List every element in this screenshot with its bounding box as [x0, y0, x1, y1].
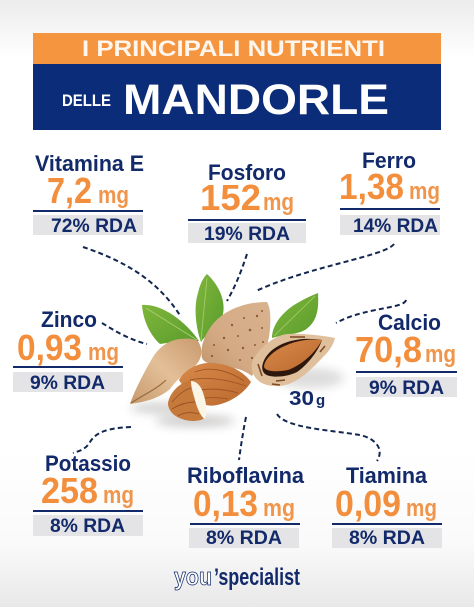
nutrient: Zinco: 0,93: [17, 327, 82, 368]
nutrient: Potassio: 8% RDA: [50, 516, 125, 537]
nutrient: Zinco: [13, 307, 123, 394]
nutrient: Potassio: Potassio: [45, 451, 131, 476]
nutrient: Calcio: Calcio: [378, 310, 441, 335]
leaf: right: [272, 293, 318, 338]
nutrient: Riboflavina: 8% RDA: [206, 528, 282, 549]
banner bottom: navy strip: DELLE: [62, 91, 111, 110]
banner top: orange strip: I PRINCIPALI NUTRIENTI: [82, 36, 385, 61]
nutrient: Riboflavina: Riboflavina: [187, 463, 305, 488]
nutrient: Tiamina: Tiamina: [346, 463, 428, 488]
nutrient: Potassio: 258: [41, 470, 98, 511]
nutrient: Vitamina E: 72% RDA: [51, 216, 137, 237]
serving size: 30 g: 30: [289, 388, 314, 410]
nutrient: Calcio: [355, 310, 457, 399]
connector: Tiamina: [277, 414, 380, 461]
nutrient: Ferro: [339, 148, 440, 237]
nutrient: Fosforo: mg: [263, 189, 294, 216]
logo: you'specialist: ’specialist: [214, 564, 300, 591]
nutrient: Fosforo: [188, 160, 306, 245]
nutrient: Zinco: Zinco: [41, 307, 97, 332]
nutrient: Fosforo: 19% RDA: [204, 224, 290, 245]
nutrient: Riboflavina: [187, 463, 305, 549]
shadow: [130, 368, 344, 426]
banner bottom: navy strip: MANDORLE: [123, 76, 389, 124]
nutrient: Ferro: 1,38: [339, 166, 404, 207]
nutrient: Fosforo: 152: [200, 177, 261, 218]
nutrient: Potassio: [33, 451, 143, 537]
nutrient: Tiamina: 8% RDA: [349, 528, 425, 549]
logo: you'specialist: [174, 564, 300, 591]
connector: Zinco: [102, 323, 147, 344]
nutrient: Tiamina: mg: [406, 495, 437, 522]
nutrient: Zinco: mg: [88, 339, 119, 366]
nutrient: Potassio: mg: [103, 482, 134, 509]
nutrient: Calcio: mg: [425, 341, 456, 368]
nutrient: Vitamina E: 7,2: [47, 170, 92, 211]
banner bottom: navy strip: [33, 64, 441, 130]
front almond kernel: [179, 363, 251, 406]
serving size: 30 g: g: [316, 392, 325, 409]
connector: Ferro: [256, 244, 394, 291]
nutrient: Vitamina E: mg: [98, 182, 129, 209]
connector: Potassio: [73, 427, 131, 453]
nutrient: Calcio: 9% RDA: [369, 378, 444, 399]
connector: Calcio: [336, 300, 406, 323]
open almond shell with kernel: [252, 334, 335, 386]
left almond in shell: [130, 339, 201, 404]
banner top: orange strip: [33, 33, 441, 65]
leaf: left: [142, 305, 199, 344]
nutrient: Ferro: Ferro: [362, 148, 416, 173]
leaf veins: [146, 278, 315, 340]
nutrient: Riboflavina: 0,13: [193, 483, 258, 524]
small almond kernel: [168, 380, 206, 421]
nutrient: Tiamina: [332, 463, 442, 549]
connector: Fosforo: [227, 254, 247, 301]
nutrient: Riboflavina: mg: [263, 495, 295, 522]
title banner: [33, 33, 441, 130]
nutrient: Ferro: 14% RDA: [353, 216, 438, 237]
serving size: 30 g: [289, 388, 325, 410]
connector: Vitamina E: [83, 247, 181, 317]
nutrient: Vitamina E: Vitamina E: [35, 151, 144, 176]
nutrient: Fosforo: Fosforo: [208, 160, 286, 185]
nutrient: Zinco: 9% RDA: [30, 373, 105, 394]
leaf: centre: [196, 274, 224, 342]
nutrient: Ferro: mg: [409, 178, 440, 205]
connector: Riboflavina: [239, 417, 246, 460]
nutrient: Tiamina: 0,09: [335, 483, 401, 524]
almonds illustration: [130, 274, 344, 426]
nutrient: Calcio: 70,8: [355, 329, 422, 370]
logo: you'specialist: you: [174, 564, 212, 591]
centre almond in shell: [201, 302, 270, 376]
nutrient: Vitamina E: [33, 151, 144, 237]
